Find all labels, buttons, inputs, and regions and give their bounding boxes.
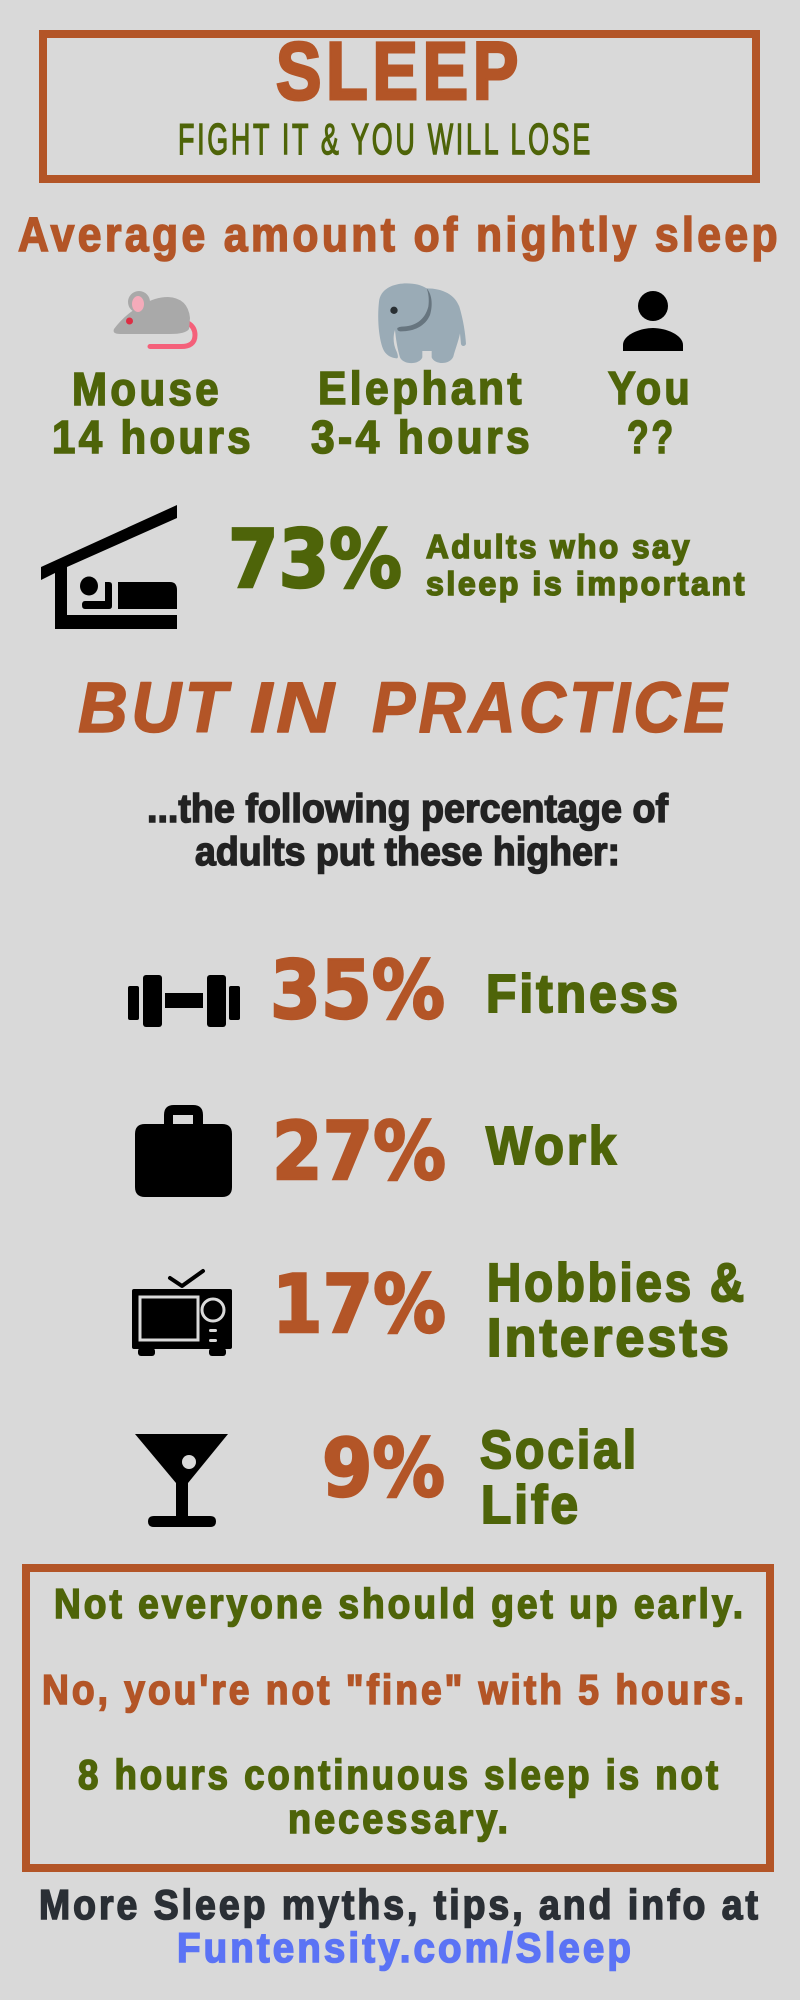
label: fitness: Fitness <box>486 964 681 1024</box>
stat: 73%: 73% <box>228 513 402 606</box>
icon: elephant <box>378 283 466 363</box>
myth: 8 hours continuous sleep: necessary. <box>288 1795 511 1842</box>
myth: 8 hours continuous sleep <box>78 1751 721 1842</box>
stat: 9% social life: 9% <box>322 1422 445 1515</box>
label: you ??: ?? <box>627 411 676 463</box>
label: social life: Life <box>481 1475 581 1535</box>
footer link: funtensity: Funtensity.com/Sleep <box>177 1924 634 1971</box>
panel: title box <box>43 26 756 179</box>
text: the following percentage of adults put these higher <box>147 787 669 874</box>
label: you ??: You <box>608 362 693 414</box>
label: mouse 14 hours: 14 hours <box>52 411 254 463</box>
label: hobbies and interests: Interests <box>487 1308 732 1368</box>
icon: person <box>623 291 683 351</box>
label: elephant 3-4 hours <box>311 362 533 463</box>
label: social life: Social <box>480 1420 639 1480</box>
text: the following percentage of adults put these higher: adults put these higher: <box>195 830 620 874</box>
label: hobbies and interests: Hobbies & <box>487 1253 747 1313</box>
panel: sleep myths box <box>26 1568 770 1868</box>
icon: mouse <box>114 291 195 347</box>
icon: martini glass <box>135 1434 228 1527</box>
icon: person in bed under roof <box>41 505 177 629</box>
label: mouse 14 hours <box>52 363 254 463</box>
label: elephant 3-4 hours: Elephant <box>318 362 525 414</box>
text: adults who say sleep is important: Adults who say <box>426 528 692 565</box>
stat: 35% fitness: 35% <box>270 944 445 1037</box>
label: you ?? <box>608 362 693 463</box>
stat: 17% hobbies: 17% <box>272 1258 446 1351</box>
heading: but in practice: PRACTICE <box>372 669 730 748</box>
stat: 27% work: 27% <box>272 1105 446 1198</box>
heading: but in practice: BUT <box>78 669 232 748</box>
text: adults who say sleep is important <box>426 528 747 602</box>
label: elephant 3-4 hours: 3-4 hours <box>311 411 533 463</box>
label: hobbies and interests <box>487 1253 747 1368</box>
myth: 8 hours continuous sleep: 8 hours continuous sleep is not <box>78 1751 721 1798</box>
heading: but in practice: IN <box>250 669 338 748</box>
label: social life <box>480 1420 639 1535</box>
text: adults who say sleep is important: sleep is important <box>426 565 747 602</box>
text: the following percentage of adults put these higher: ...the following percentage of <box>147 787 669 831</box>
title: SLEEP <box>276 26 523 117</box>
label: work: Work <box>486 1116 619 1176</box>
icon: television <box>132 1271 232 1356</box>
label: mouse 14 hours: Mouse <box>72 363 222 415</box>
icon: briefcase <box>135 1105 232 1197</box>
icon: dumbbell <box>128 975 240 1027</box>
